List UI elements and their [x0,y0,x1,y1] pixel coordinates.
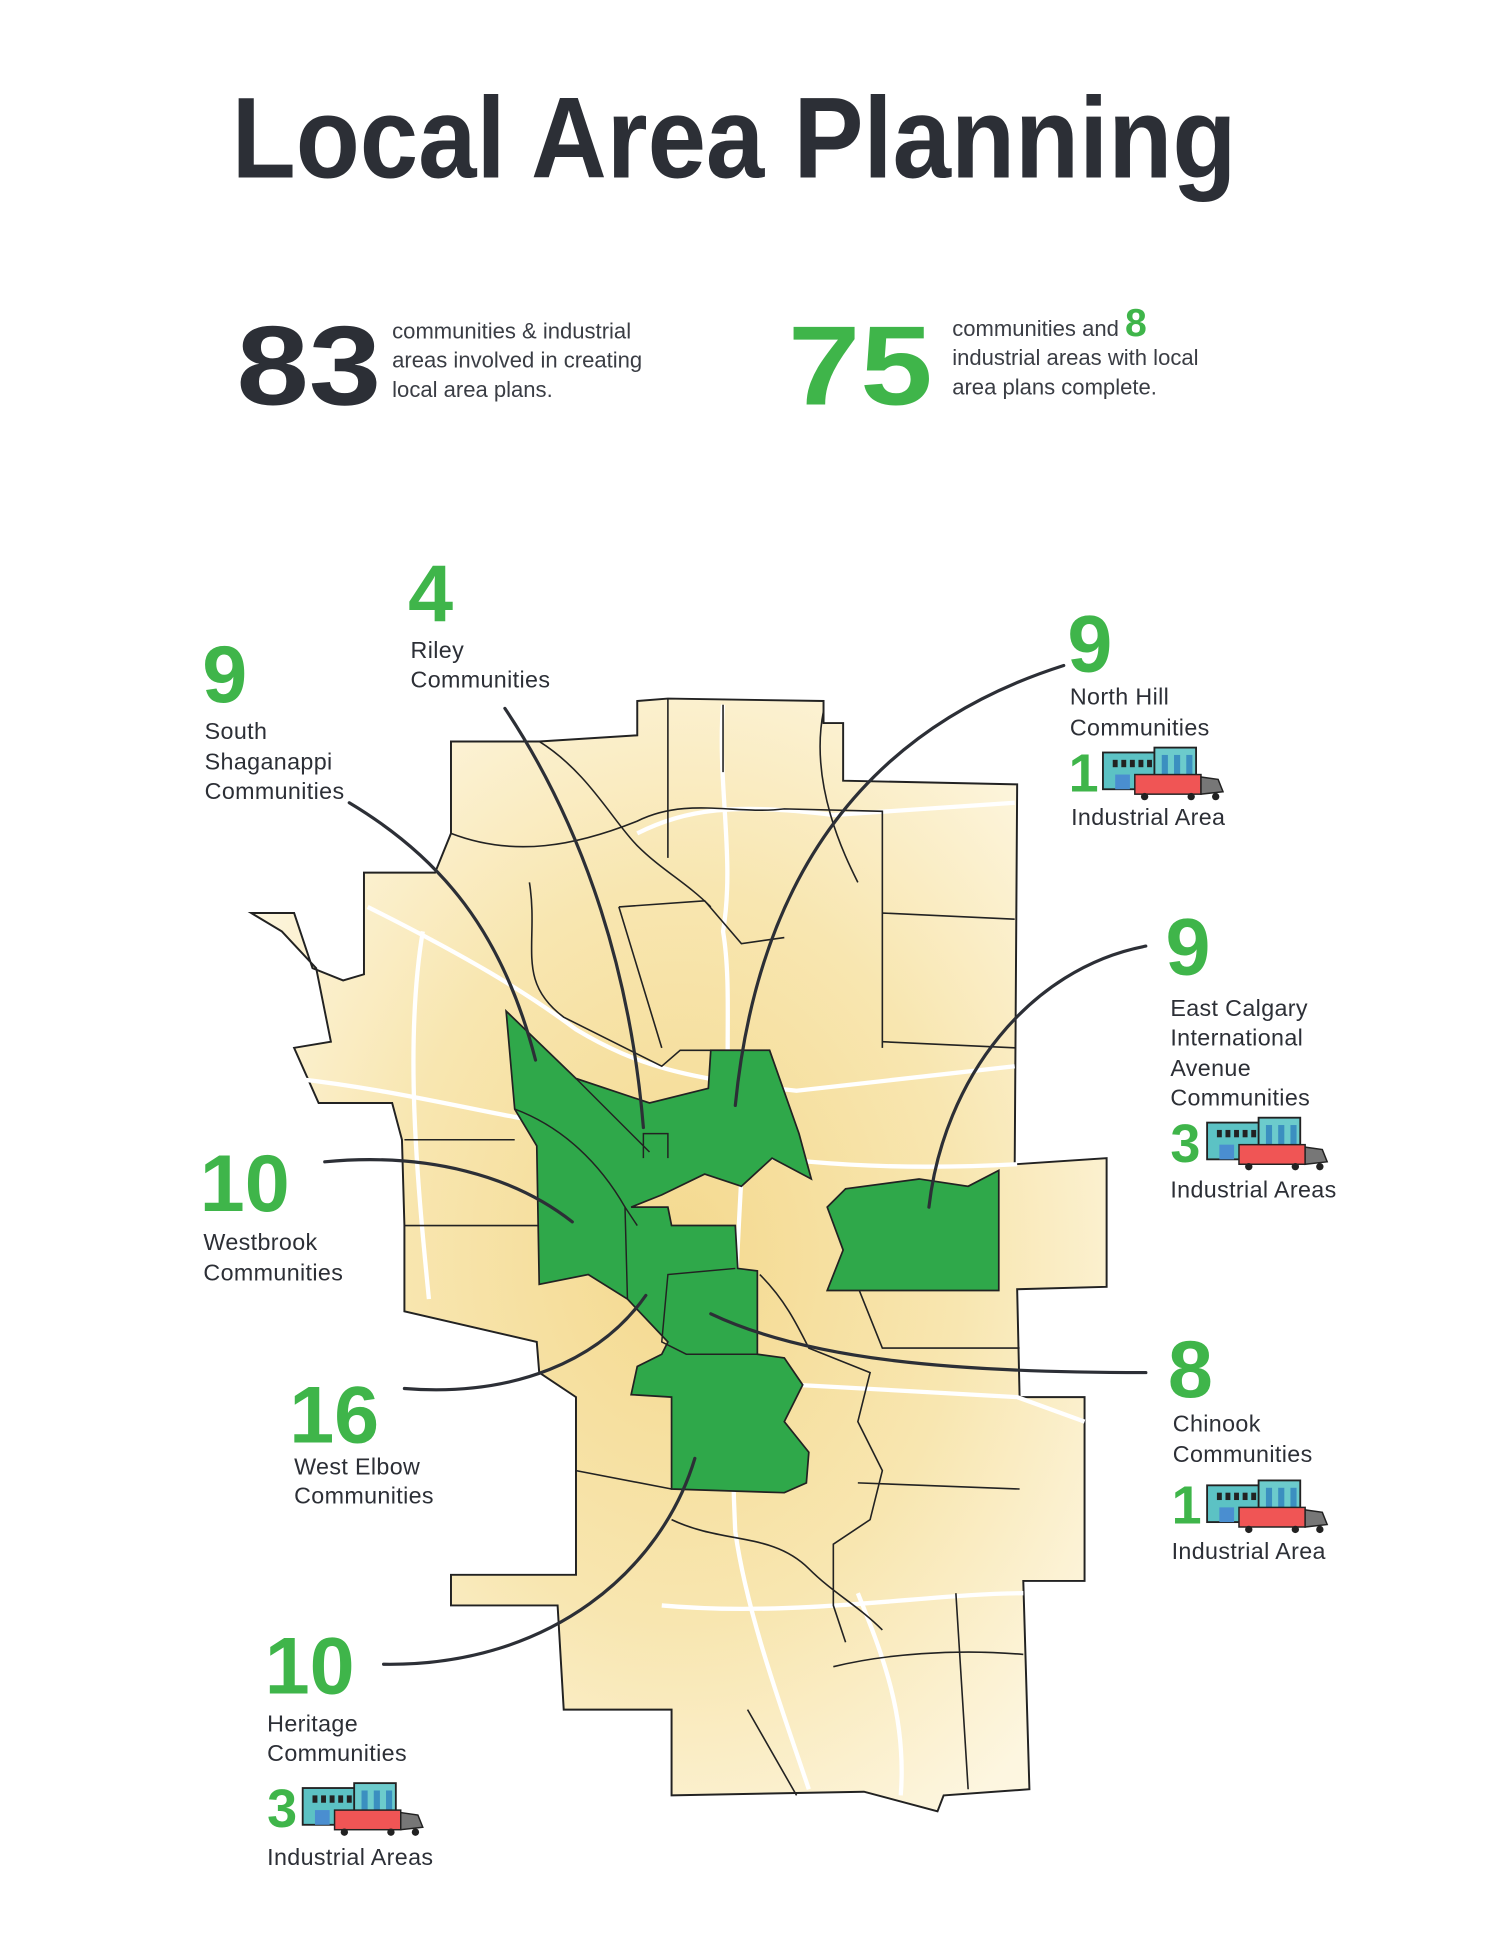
stat: 75 communities: area plans complete. [952,375,1157,400]
label: Heritage [265,1622,433,1870]
label: South Shaganappi [202,630,344,804]
label: East Calgary [1165,902,1337,1202]
label: Riley [408,549,550,693]
label: North Hill [1067,600,1225,830]
title: Local Area Planning [232,75,1237,203]
label: Heritage: 10 [265,1622,355,1712]
label: West Elbow: 16 [289,1370,379,1460]
label: Riley: Riley [411,637,464,663]
label: North Hill: Industrial Area [1071,804,1225,830]
label: Heritage: Industrial Areas [267,1844,433,1870]
label: Chinook: 1 [1172,1475,1202,1535]
stat: 83 communities: communities & industrial [392,318,631,343]
label: Chinook: Communities [1173,1441,1313,1467]
label: North Hill: 1 [1069,744,1099,804]
label: East Calgary: East Calgary [1170,995,1308,1021]
label: Chinook: 8 [1168,1325,1213,1415]
label: Chinook: Chinook [1173,1410,1261,1436]
label: Westbrook: 10 [200,1139,290,1229]
stat: 75 communities: communities and 8 [952,302,1147,345]
label: West Elbow: Communities [294,1483,434,1509]
stat: 83 communities: areas involved in creating [392,348,642,373]
label: West Elbow: West Elbow [294,1453,420,1479]
label: East Calgary: 3 [1170,1114,1200,1174]
label: Riley: Communities [411,667,550,693]
label: Westbrook: Westbrook [203,1229,318,1255]
label: Heritage: Heritage [267,1711,358,1737]
label: North Hill: North Hill [1070,684,1169,710]
label: Westbrook: Communities [203,1260,343,1286]
stat: 83 communities [237,302,642,428]
stat: 83 communities: local area plans. [392,377,553,402]
label: South Shaganappi: Shaganappi [205,749,333,775]
label: South Shaganappi: Communities [205,778,344,804]
label: East Calgary: Communities [1170,1084,1310,1110]
stat: 83 communities: 83 [237,302,381,428]
label: North Hill: 9 [1067,600,1112,690]
leader lines [325,665,1146,1664]
label: East Calgary: Industrial Areas [1170,1176,1337,1202]
label: Heritage: 3 [267,1779,297,1839]
stat: 75 communities: 75 [788,302,933,428]
stat: 75 communities [788,302,1199,428]
label: East Calgary: International [1170,1024,1303,1050]
label: Heritage: Communities [267,1740,407,1766]
label: South Shaganappi: 9 [202,630,247,720]
label: Riley: 4 [408,549,453,639]
stat: 75 communities: industrial areas with local [952,345,1199,370]
label: South Shaganappi: South [205,718,267,744]
label: Chinook [1168,1325,1327,1564]
label: Westbrook [200,1139,343,1286]
map [251,699,1107,1811]
label: Chinook: Industrial Area [1172,1538,1326,1564]
label: East Calgary: 9 [1165,902,1210,992]
label: West Elbow [289,1370,434,1509]
label: East Calgary: Avenue [1170,1055,1251,1081]
label: North Hill: Communities [1070,714,1210,740]
